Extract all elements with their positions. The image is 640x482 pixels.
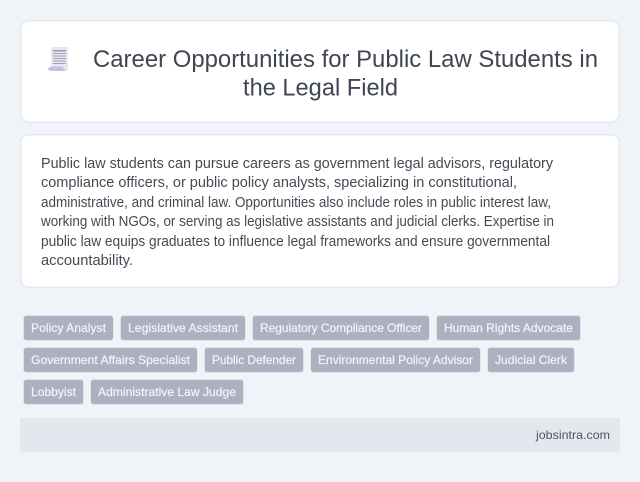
title: Career Opportunities for Public Law Students in — [93, 46, 598, 73]
panel: description — [21, 135, 619, 287]
tag: Government Affairs Specialist: Government Affairs Specialist — [31, 353, 191, 367]
tag: Regulatory Compliance Officer: Regulatory Compliance Officer — [260, 321, 422, 335]
tag: Policy Analyst — [24, 316, 114, 340]
tag: Environmental Policy Advisor: Environmental Policy Advisor — [318, 353, 473, 367]
description text: compliance officers, or public policy analysts, specializing in constitutional, — [41, 175, 517, 191]
tag: Human Rights Advocate — [436, 316, 580, 340]
title: the Legal Field — [243, 74, 398, 102]
tag: Public Defender — [204, 348, 304, 372]
tag: Judicial Clerk — [488, 348, 574, 372]
description text: public law equips graduates to influence legal frameworks and ensure governmental — [41, 234, 550, 250]
tag: Lobbyist — [24, 380, 84, 404]
footer source text: jobsintra.com — [535, 428, 610, 442]
tag: Human Rights Advocate: Human Rights Advocate — [444, 321, 573, 335]
icon: legal document scroll — [48, 47, 68, 71]
tags: career roles — [24, 316, 580, 404]
description text: working with NGOs, or serving as legislative assistants and judicial clerks. Expertise in — [40, 214, 554, 230]
tag: Policy Analyst: Policy Analyst — [31, 321, 107, 335]
tag: Environmental Policy Advisor — [310, 348, 480, 372]
tag: Administrative Law Judge — [90, 380, 244, 404]
tag: Judicial Clerk: Judicial Clerk — [495, 353, 568, 367]
tag: Administrative Law Judge: Administrative Law Judge — [98, 385, 236, 399]
tag: Regulatory Compliance Officer — [252, 316, 430, 340]
description text — [40, 156, 554, 269]
description text: accountability. — [41, 253, 133, 269]
tag: Legislative Assistant — [120, 316, 246, 340]
description text: administrative, and criminal law. Opportunities also include roles in public interest law, — [41, 195, 551, 211]
title — [93, 46, 598, 102]
tag: Government Affairs Specialist — [24, 348, 198, 372]
panel: header — [21, 21, 619, 122]
tag: Legislative Assistant: Legislative Assistant — [128, 321, 239, 335]
footer — [20, 418, 620, 452]
tag: Lobbyist: Lobbyist — [31, 385, 77, 399]
tag: Public Defender: Public Defender — [212, 353, 296, 367]
description text: Public law students can pursue careers as government legal advisors, regulatory — [41, 156, 554, 172]
